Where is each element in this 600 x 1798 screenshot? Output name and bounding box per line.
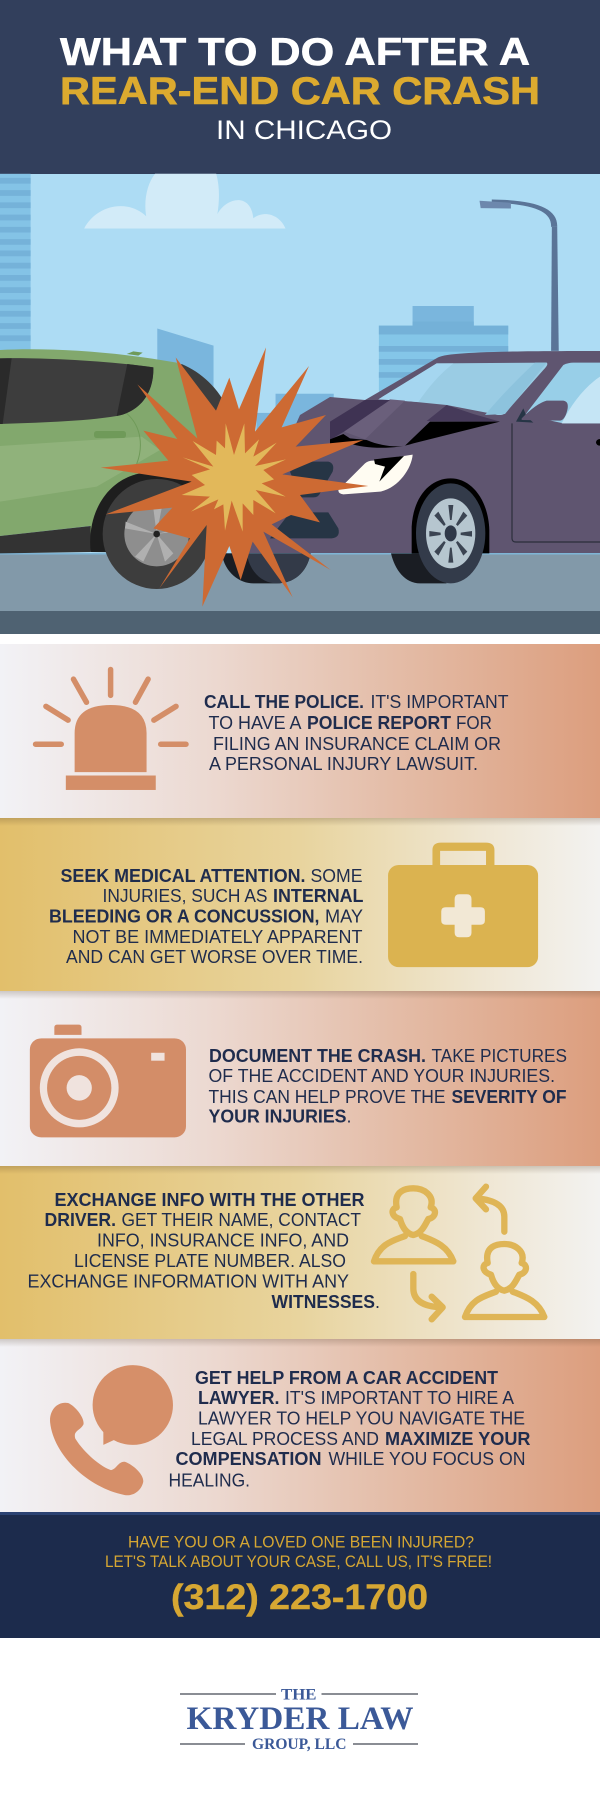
call to action band <box>0 1512 600 1638</box>
icon: siren <box>36 670 186 790</box>
text: get legal help: HEALING. <box>168 1470 250 1490</box>
light panel <box>0 437 160 502</box>
text: exchange info <box>28 1190 380 1312</box>
roof fin <box>127 351 143 356</box>
left skyscraper <box>0 174 31 353</box>
text: exchange info: . <box>375 1292 380 1312</box>
bumper <box>0 526 91 553</box>
text: call the police <box>204 692 508 774</box>
text: call the police: IT'S IMPORTANT <box>370 692 508 712</box>
wheel <box>103 479 211 589</box>
text: document the crash: TAKE PICTURES <box>432 1046 567 1066</box>
logo: The Kryder Law Group, LLC: KRYDER LAW <box>186 1701 414 1737</box>
door seam and handle <box>512 423 600 542</box>
text: get legal help: WHILE YOU FOCUS ON <box>328 1449 526 1469</box>
centre buildings <box>157 328 334 435</box>
text: seek medical attention: SEEK MEDICAL ATTENTION. <box>60 866 306 886</box>
text: seek medical attention: NOT BE IMMEDIATELY APPARENT <box>72 927 362 947</box>
grille <box>270 462 339 538</box>
step 2: seek medical attention <box>0 818 600 991</box>
step 4: exchange info <box>0 1166 600 1339</box>
title line 1: WHAT TO DO AFTER A <box>60 31 530 74</box>
text: call the police: TO HAVE A <box>208 713 302 733</box>
illustration: rear-end car crash scene <box>0 174 600 634</box>
text: seek medical attention: BLEEDING OR A CONCUSSION, <box>49 906 320 926</box>
icon: two people exchanging info <box>374 1187 544 1319</box>
person two <box>465 1244 544 1317</box>
text: seek medical attention: INTERNAL <box>273 886 364 906</box>
text: document the crash: YOUR INJURIES <box>208 1106 346 1126</box>
cta question: HAVE YOU OR A LOVED ONE BEEN INJURED? <box>128 1532 474 1552</box>
title line 2: REAR-END CAR CRASH <box>60 70 540 113</box>
road <box>0 553 600 634</box>
text: exchange info: LICENSE PLATE NUMBER. ALSO <box>74 1251 346 1271</box>
text: document the crash: OF THE ACCIDENT AND YOUR INJURIES. <box>208 1066 555 1086</box>
front far wheel <box>222 553 311 583</box>
text: get legal help: GET HELP FROM A CAR ACCIDENT <box>195 1368 498 1388</box>
wheel arch <box>90 473 207 553</box>
crumpled hood <box>330 399 500 448</box>
subtitle: IN CHICAGO <box>216 115 392 145</box>
spoiler <box>176 364 230 437</box>
headlight <box>338 455 413 494</box>
wing mirror <box>516 401 568 423</box>
body <box>245 351 600 553</box>
icon: phone with speech bubble <box>50 1365 173 1495</box>
backdrop: skyline and lamp <box>0 174 559 435</box>
text: seek medical attention <box>49 866 364 967</box>
side window <box>525 363 600 423</box>
body <box>0 349 213 540</box>
text: exchange info: WITNESSES <box>272 1292 375 1312</box>
step 1: call the police <box>0 644 600 818</box>
rear window <box>0 358 153 424</box>
icon: camera <box>30 1025 186 1137</box>
text: get legal help: LAWYER. <box>198 1388 280 1408</box>
arrow up <box>476 1187 504 1232</box>
text: exchange info: GET THEIR NAME, CONTACT <box>122 1210 361 1230</box>
text: document the crash: . <box>346 1106 352 1126</box>
yellow core <box>182 423 286 532</box>
text: document the crash <box>208 1046 567 1126</box>
text: document the crash: DOCUMENT THE CRASH. <box>209 1046 426 1066</box>
text: seek medical attention: INJURIES, SUCH AS <box>102 886 268 906</box>
text: get legal help <box>168 1368 530 1490</box>
text: exchange info: DRIVER. <box>44 1210 116 1230</box>
orange burst <box>101 347 368 607</box>
header banner <box>0 0 600 174</box>
logo: The Kryder Law Group, LLC <box>180 1686 418 1753</box>
near wheel <box>391 478 489 583</box>
text: get legal help: MAXIMIZE YOUR <box>385 1429 530 1449</box>
text: get legal help: LEGAL PROCESS AND <box>191 1429 379 1449</box>
icon: first aid kit <box>388 843 538 967</box>
text: call the police: FOR <box>456 713 492 733</box>
person one <box>374 1188 453 1261</box>
step 3: document the crash <box>0 991 600 1166</box>
cloud <box>84 174 285 228</box>
explosion burst <box>101 347 368 607</box>
door handle <box>94 431 126 438</box>
green car <box>0 349 230 589</box>
text: exchange info: EXCHANGE INFORMATION WITH ANY <box>28 1272 349 1292</box>
text: get legal help: COMPENSATION <box>176 1449 322 1469</box>
text: get legal help: LAWYER TO HELP YOU NAVIGATE THE <box>198 1408 525 1428</box>
arrow down <box>413 1274 443 1319</box>
right building <box>379 306 508 395</box>
text: call the police: POLICE REPORT <box>307 713 451 733</box>
text: call the police: CALL THE POLICE. <box>204 692 364 712</box>
cta invitation: LET'S TALK ABOUT YOUR CASE, CALL US, IT'S FREE! <box>105 1552 492 1571</box>
logo: The Kryder Law Group, LLC: THE <box>281 1686 316 1704</box>
text: seek medical attention: MAY <box>325 906 363 926</box>
text: exchange info: EXCHANGE INFO WITH THE OTHER <box>54 1190 364 1210</box>
street lamp <box>480 200 559 351</box>
text: exchange info: INFO, INSURANCE INFO, AND <box>97 1230 349 1250</box>
text: call the police: A PERSONAL INJURY LAWSUIT. <box>209 754 478 774</box>
text: seek medical attention: SOME <box>310 866 362 886</box>
door seam <box>127 413 140 464</box>
purple car <box>222 351 600 583</box>
text: document the crash: THIS CAN HELP PROVE THE <box>208 1087 446 1107</box>
windshield <box>378 363 547 415</box>
step 5: get legal help <box>0 1339 600 1513</box>
text: document the crash: SEVERITY OF <box>452 1087 566 1107</box>
phone number: (312) 223-1700 <box>171 1578 428 1617</box>
logo: The Kryder Law Group, LLC: GROUP, LLC <box>252 1736 346 1753</box>
text: seek medical attention: AND CAN GET WORSE OVER TIME. <box>66 947 363 967</box>
text: call the police: FILING AN INSURANCE CLAIM OR <box>213 734 501 754</box>
text: get legal help: IT'S IMPORTANT TO HIRE A <box>285 1388 514 1408</box>
